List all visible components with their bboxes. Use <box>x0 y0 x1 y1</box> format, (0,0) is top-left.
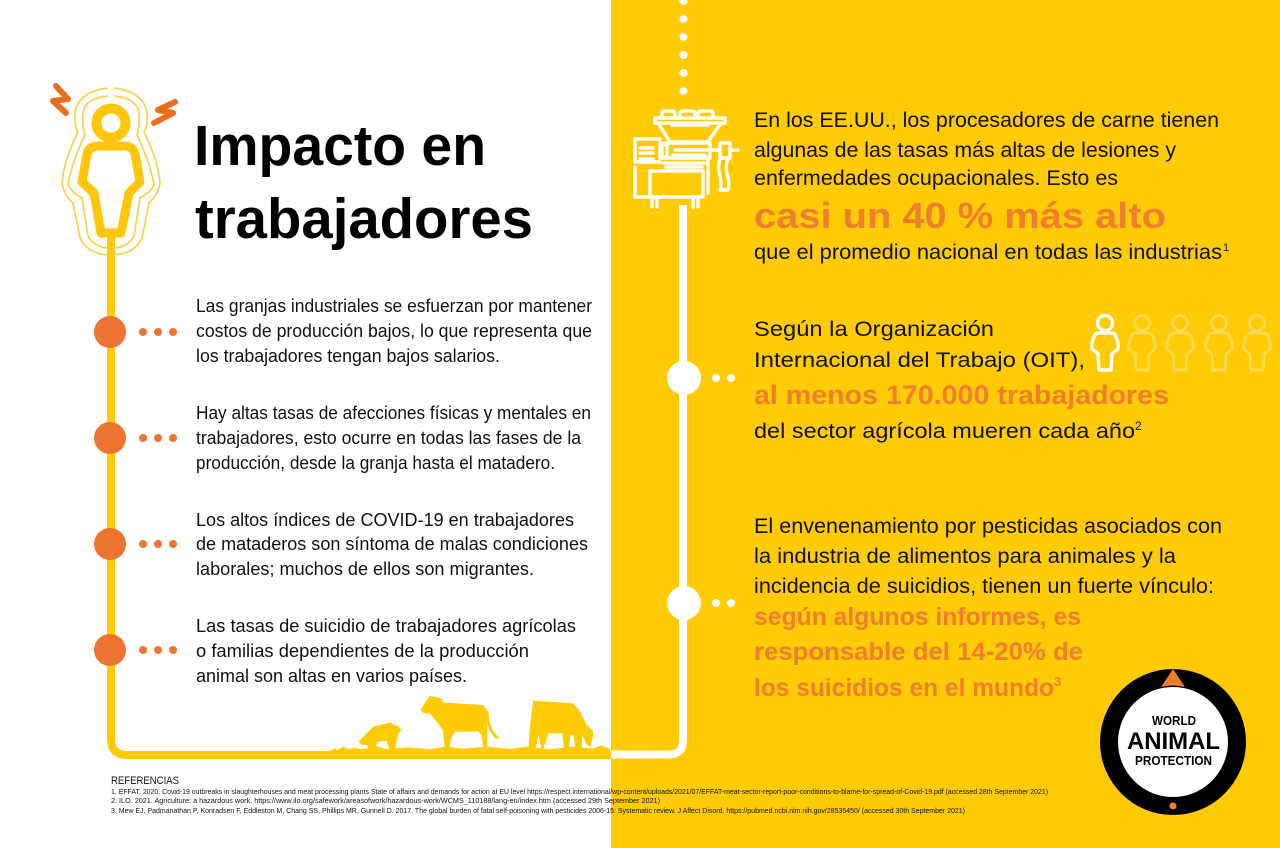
standing cow <box>421 696 500 749</box>
text block: ILO deaths: del sector agrícola mueren cada año <box>754 420 1135 443</box>
text block: physical and mental conditions: trabajadores, esto ocurre en todas las fases de la <box>196 428 582 448</box>
text block: pesticide poisoning <box>754 515 1222 702</box>
pig <box>358 723 402 750</box>
grass band <box>330 745 610 759</box>
text block: COVID-19: de mataderos son síntoma de malas condiciones <box>196 534 588 554</box>
logo: World Animal Protection: ANIMAL <box>1127 728 1220 755</box>
farm animals silhouette <box>330 696 610 759</box>
title: trabajadores <box>195 187 533 251</box>
references: 3. Mew EJ, Padmanathan P, Konradsen F, Eddleston M, Chang SS, Phillips MR, Gunnell D. 2017. The global burden of fatal self-poisoning with pesticides 2006-15: Systematic review. J Affect Disord. https://pubmed.ncbi.nlm.nih.gov/28535450/ (accessed 30th September 2021) <box>111 806 965 815</box>
connecting line: yellow section <box>111 232 611 755</box>
text block: low wages: Las granjas industriales se esfuerzan por mantener <box>196 296 592 316</box>
text block: pesticide poisoning: responsable del 14-20% de <box>754 638 1083 666</box>
text block: pesticide poisoning: los suicidios en el mundo <box>754 674 1054 702</box>
text block: ILO deaths: Internacional del Trabajo (OIT), <box>754 349 1085 372</box>
text block: suicide rates: Las tasas de suicidio de trabajadores agrícolas <box>196 616 576 636</box>
text block: low wages: costos de producción bajos, lo que representa que <box>196 321 592 341</box>
grazing cow <box>528 701 593 749</box>
text block: COVID-19 <box>196 510 588 579</box>
text block: injuries in meat processing: casi un 40 % más alto <box>754 195 1166 236</box>
references: REFERENCIAS <box>111 775 179 787</box>
text block: COVID-19: laborales; muchos de ellos son migrantes. <box>196 559 534 579</box>
orange timeline markers <box>94 316 177 666</box>
logo: World Animal Protection: PROTECTION <box>1135 753 1212 768</box>
references: 1. EFFAT. 2020. Covid-19 outbreaks in slaughterhouses and meat processing plants State of affairs and demands for action at EU level https://respect.international/wp-content/uploads/2021/07/EFFAT-meat-sector-report-poor-conditions-to-blame-for-spread-of-Covid-19.pdf (accessed 28th September 2021) <box>111 787 1048 796</box>
connecting line: white section <box>611 205 683 754</box>
icon: stressed worker <box>53 86 175 255</box>
logo: World Animal Protection <box>1100 669 1246 815</box>
text block: pesticide poisoning: El envenenamiento por pesticidas asociados con <box>754 515 1222 538</box>
text block: ILO deaths: Según la Organización <box>754 318 994 341</box>
text block: pesticide poisoning: según algunos informes, es <box>754 603 1081 631</box>
title <box>194 114 533 251</box>
text block: low wages: los trabajadores tengan bajos salarios. <box>196 346 500 366</box>
white timeline marker: ILO <box>667 361 735 395</box>
logo: World Animal Protection: WORLD <box>1152 713 1196 728</box>
text block: physical and mental conditions: Hay altas tasas de afecciones físicas y mentales en <box>196 403 591 423</box>
text block: COVID-19: Los altos índices de COVID-19 en trabajadores <box>196 510 574 530</box>
text block: ILO deaths <box>754 318 1169 443</box>
text block: suicide rates <box>196 616 576 686</box>
text block: injuries in meat processing: 1 <box>1223 242 1229 254</box>
text block: pesticide poisoning: la industria de alimentos para animales y la <box>754 545 1176 568</box>
text block: physical and mental conditions <box>196 403 591 473</box>
text block: injuries in meat processing: algunas de las tasas más altas de lesiones y <box>754 139 1176 162</box>
icon: five workers, one highlighted <box>1092 316 1270 370</box>
yellow panel background <box>611 0 1280 848</box>
references <box>111 775 1048 815</box>
text block: injuries in meat processing: enfermedades ocupacionales. Esto es <box>754 167 1118 190</box>
icon: meat grinder <box>635 111 738 207</box>
text block: physical and mental conditions: producción, desde la granja hasta el matadero. <box>196 453 555 473</box>
text block: suicide rates: o familias dependientes de la producción <box>196 641 529 661</box>
white timeline marker: pesticides <box>667 586 735 620</box>
text block: low wages <box>196 296 592 366</box>
references: 2. ILO. 2021. Agriculture: a hazardous work. https://www.ilo.org/safework/areasofwork/hazardous-work/WCMS_110188/lang-en/index.htm (accessed 29th September 2021) <box>111 796 660 805</box>
white dotted line at top <box>680 0 688 95</box>
text block: ILO deaths: al menos 170.000 trabajadores <box>754 380 1169 410</box>
text block: injuries in meat processing: En los EE.UU., los procesadores de carne tienen <box>754 109 1219 132</box>
text block: suicide rates: animal son altas en varios países. <box>196 666 467 686</box>
white panel background <box>0 0 611 848</box>
text block: injuries in meat processing: que el promedio nacional en todas las industrias <box>754 241 1222 264</box>
text block: ILO deaths: 2 <box>1135 419 1142 433</box>
text block: injuries in meat processing <box>754 109 1229 264</box>
text block: pesticide poisoning: 3 <box>1054 674 1061 689</box>
title: Impacto en <box>194 114 486 178</box>
text block: pesticide poisoning: incidencia de suicidios, tienen un fuerte vínculo: <box>754 575 1214 598</box>
